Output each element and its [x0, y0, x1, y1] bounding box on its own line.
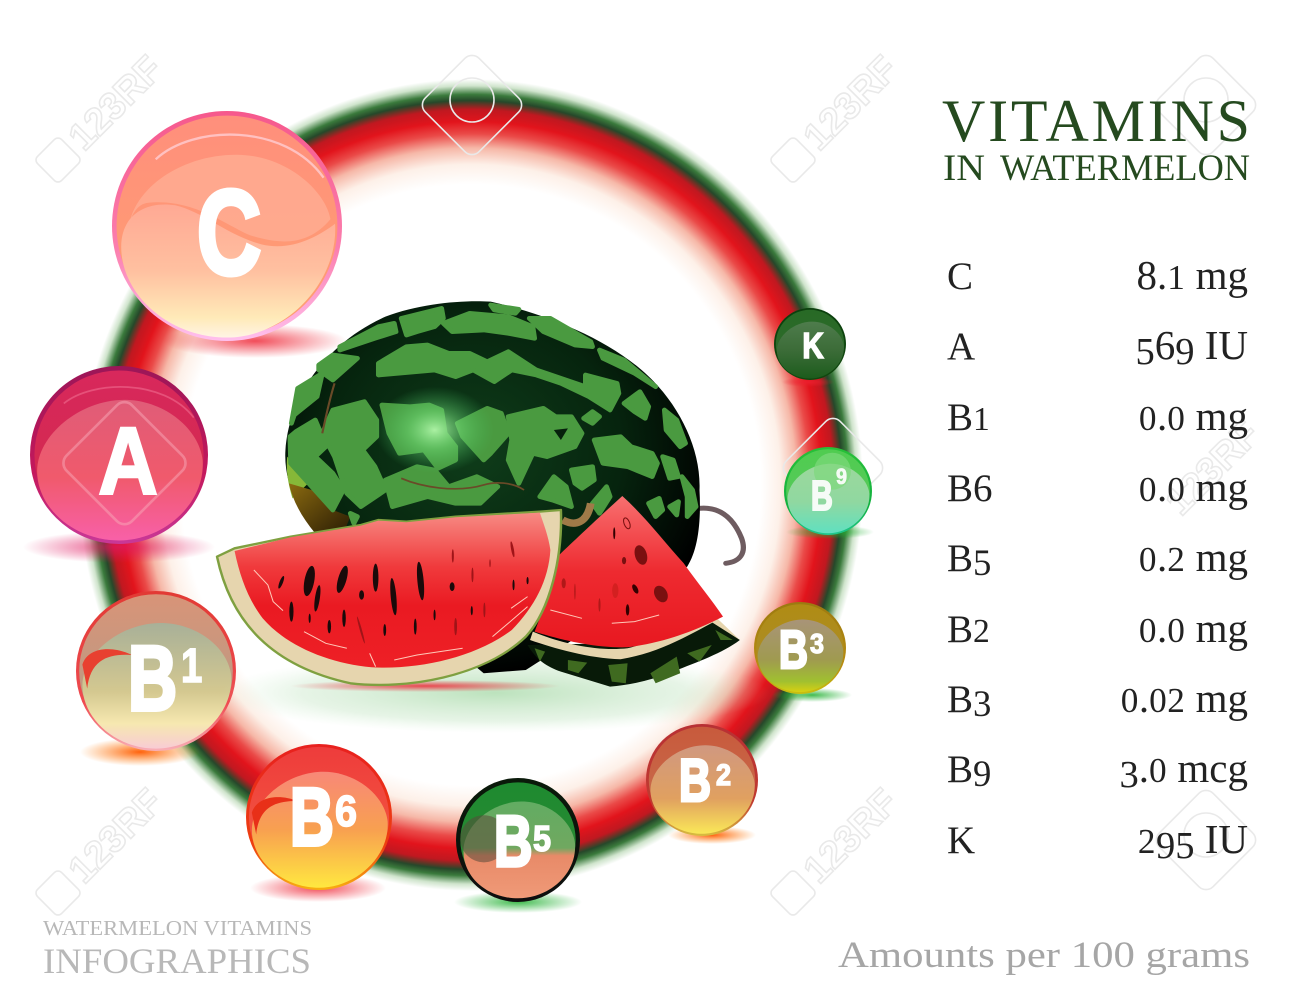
- watermark stamps: 123RF: [796, 781, 906, 892]
- row: B5: 0.2 mg: [1139, 534, 1248, 580]
- bubble label B1: B: [128, 628, 177, 730]
- bubble: vitamin B9: [784, 447, 872, 535]
- bubble label B9: 9: [836, 465, 847, 489]
- big slice flesh: [235, 513, 550, 668]
- big slice seeds: [277, 561, 529, 636]
- footer: infographics caption: [43, 916, 312, 981]
- bubble label B3: B: [779, 620, 808, 681]
- vitamin amounts table: [947, 252, 1248, 867]
- melon lower-left shading: [287, 457, 310, 498]
- row: B9: 3.0 mcg: [1120, 745, 1248, 796]
- row: B9: [947, 745, 1248, 796]
- row: B2: B2: [947, 608, 990, 651]
- bubble label B9: [811, 465, 847, 519]
- melon stem tail: [700, 508, 743, 563]
- row: B5: B5: [947, 537, 991, 583]
- row: B6: 0.0 mg: [1139, 464, 1248, 510]
- row: A: [947, 322, 1248, 373]
- row: B3: B3: [947, 678, 991, 724]
- title: WATERMELON: [1000, 148, 1250, 189]
- melon stripes: [290, 305, 696, 523]
- bubble label B5: 5: [533, 819, 551, 859]
- row: A: A: [947, 325, 975, 368]
- bubble: vitamin C: [112, 111, 342, 341]
- row: K: 295 IU: [1138, 816, 1248, 867]
- row: B2: [947, 605, 1248, 651]
- bubble label B5: [494, 802, 551, 882]
- bubble label B6: [290, 772, 357, 863]
- row: B1: [947, 393, 1248, 439]
- row: C: C: [947, 255, 973, 298]
- bubble: vitamin B2: [646, 724, 758, 836]
- bubble: vitamin B5: [456, 778, 580, 902]
- big slice flesh veins: [254, 570, 659, 667]
- bubble label B2: [679, 748, 731, 815]
- bubble: vitamin B1: [76, 591, 236, 751]
- bubble label B3: [779, 620, 824, 681]
- ground shadow under watermelon: [220, 653, 770, 733]
- watermark stamps: 123RF: [61, 48, 171, 159]
- bubble ground shadows: [23, 324, 874, 913]
- row: B1: B1: [947, 396, 990, 439]
- row: B9: B9: [947, 748, 991, 794]
- row: B6: [947, 464, 1248, 510]
- bubble label B5: B: [494, 802, 532, 882]
- bubble label B3: 3: [810, 628, 824, 659]
- watermark stamps: 123RF: [61, 781, 171, 892]
- circular ring: [79, 79, 863, 891]
- bubble label B6: 6: [335, 786, 357, 835]
- melon twigs: [401, 478, 524, 490]
- row: K: [947, 816, 1248, 867]
- small slice rind: [530, 613, 740, 659]
- bubble label B2: B: [679, 748, 711, 815]
- bubble label B2: 2: [716, 759, 731, 792]
- row: B2: 0.0 mg: [1139, 605, 1248, 651]
- row: B6: B6: [947, 467, 993, 510]
- watermark stamps: 123RF: [796, 48, 906, 159]
- bubble label B9: B: [811, 472, 833, 519]
- bubble label K: K: [802, 325, 824, 366]
- small slice flesh: [535, 496, 723, 647]
- bubble label C: C: [197, 166, 261, 300]
- melon highlight: [375, 387, 494, 473]
- big slice rind: [217, 510, 561, 685]
- row: B3: [947, 675, 1248, 724]
- small slice seeds: [562, 517, 670, 616]
- small slice skin: [528, 618, 740, 687]
- bubble label B1: 1: [181, 640, 202, 693]
- bubble label B6: B: [290, 772, 334, 863]
- row: C: [947, 252, 1248, 298]
- row: B3: 0.02 mg: [1121, 675, 1248, 721]
- whole melon body: [285, 301, 700, 673]
- bubble: vitamin B3: [754, 602, 846, 694]
- footer: infographics caption: INFOGRAPHICS: [43, 941, 311, 981]
- footer: infographics caption: WATERMELON VITAMINS: [43, 916, 312, 940]
- row: A: 569 IU: [1135, 322, 1248, 373]
- title: IN: [943, 148, 985, 189]
- row: C: 8.1 mg: [1136, 252, 1248, 298]
- title: VITAMINS: [942, 88, 1250, 154]
- bubble: vitamin K: [774, 308, 846, 380]
- bubble label A: A: [98, 407, 158, 514]
- watermark stamps: 123RF: [1158, 413, 1268, 524]
- row: K: K: [947, 819, 975, 862]
- bubble label B1: [128, 628, 202, 730]
- row: B5: [947, 534, 1248, 583]
- bubble: vitamin B6: [246, 744, 392, 890]
- illustration: watermelon: [217, 301, 743, 687]
- row: B1: 0.0 mg: [1139, 393, 1248, 439]
- title: [942, 88, 1250, 189]
- footer: units note: Amounts per 100 grams: [838, 935, 1250, 976]
- bubble: vitamin A: [30, 366, 208, 544]
